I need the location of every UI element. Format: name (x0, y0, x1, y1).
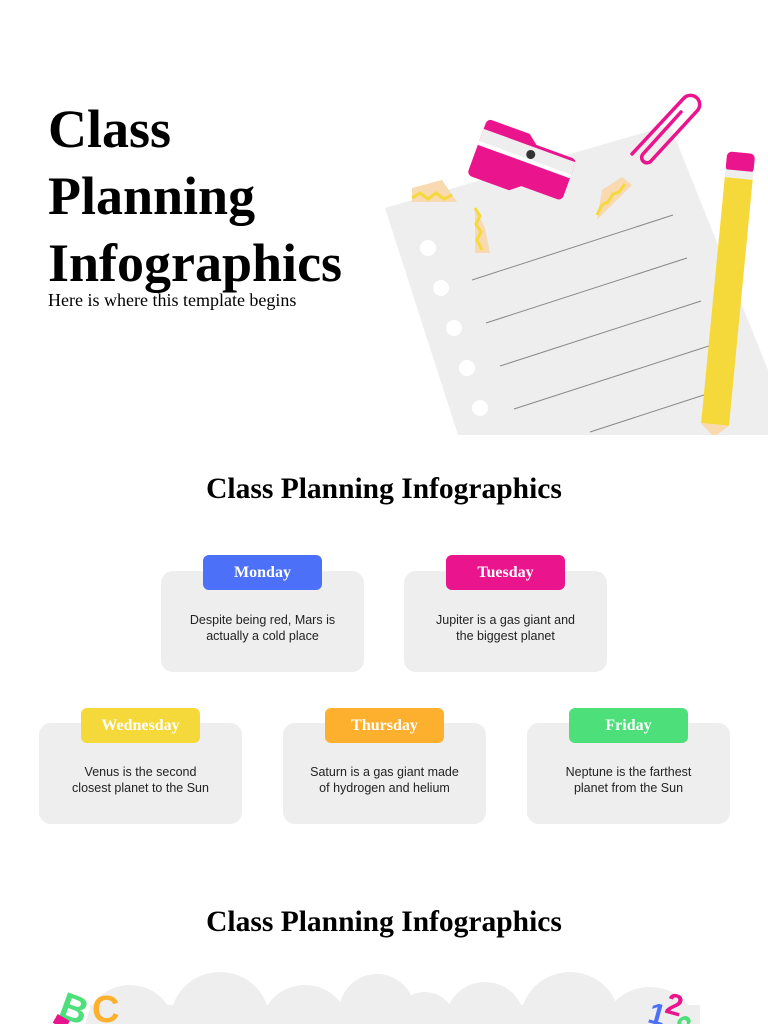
cloud with letters and numbers: 2 (662, 987, 687, 1023)
card: Friday: Neptune is the farthest (566, 765, 691, 779)
subtitle: Here is where this template begins (48, 290, 296, 310)
card: Thursday (283, 723, 486, 824)
tab: Thursday (325, 708, 444, 743)
title: Planning (48, 166, 255, 226)
title: Infographics (48, 233, 342, 293)
title: Class (48, 99, 171, 159)
card: Friday (527, 723, 730, 824)
card: Monday (161, 571, 364, 672)
tab: Tuesday (446, 555, 565, 590)
card: Thursday: Saturn is a gas giant made (310, 765, 459, 779)
card: Monday: actually a cold place (206, 629, 319, 643)
card: Monday: Despite being red, Mars is (190, 613, 335, 627)
tab: Monday: Monday (234, 564, 291, 581)
card: Wednesday: Venus is the second (85, 765, 196, 779)
illustration: paper, sharpener, clip, pencil (385, 94, 768, 435)
section heading 1: Class Planning Infographics (206, 473, 562, 505)
cloud with letters and numbers (52, 972, 703, 1024)
card: Tuesday: Jupiter is a gas giant and (436, 613, 575, 627)
card: Tuesday (404, 571, 607, 672)
tab: Friday: Friday (605, 717, 652, 734)
section heading 2: Class Planning Infographics (206, 906, 562, 938)
tab: Friday (569, 708, 688, 743)
tab: Wednesday (81, 708, 200, 743)
card: Wednesday (39, 723, 242, 824)
card: Thursday: of hydrogen and helium (319, 781, 450, 795)
tab: Thursday: Thursday (351, 717, 418, 734)
card: Friday: planet from the Sun (574, 781, 683, 795)
tab: Tuesday: Tuesday (477, 564, 534, 581)
card: Wednesday: closest planet to the Sun (72, 781, 209, 795)
title (48, 99, 342, 293)
tab: Wednesday: Wednesday (101, 717, 180, 734)
tab: Monday (203, 555, 322, 590)
card: Tuesday: the biggest planet (456, 629, 555, 643)
